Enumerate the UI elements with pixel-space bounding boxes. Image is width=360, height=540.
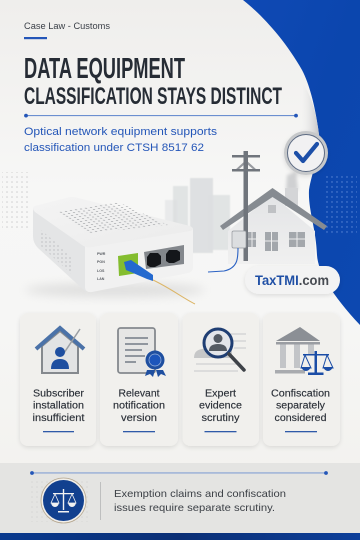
icon: magnifier <box>194 329 246 371</box>
ethernet ports <box>144 245 184 269</box>
footer text: issues require separate scrutiny. <box>114 503 275 514</box>
skyline <box>165 178 230 253</box>
label: installation <box>33 400 84 412</box>
title rule <box>24 114 298 118</box>
label <box>32 388 85 424</box>
footer text <box>114 489 286 514</box>
status labels <box>97 252 106 281</box>
icon: house with subscriber <box>36 328 84 373</box>
dot pattern: left <box>2 172 28 230</box>
label: considered <box>274 413 326 424</box>
label: Subscriber <box>33 388 85 400</box>
card: notification version <box>100 313 178 446</box>
left face <box>33 208 86 292</box>
label: scrutiny <box>202 413 240 424</box>
title <box>24 53 282 110</box>
utility pole <box>232 151 260 261</box>
page curl shading <box>300 84 319 142</box>
subtitle: Optical network equipment supports <box>24 126 217 138</box>
top face <box>33 197 193 247</box>
status labels: LAN <box>97 277 105 281</box>
blue connector <box>124 260 153 281</box>
floor shadow <box>25 283 205 297</box>
footer dots <box>28 480 90 522</box>
footer panel <box>0 463 360 533</box>
status labels: PON <box>97 260 105 264</box>
card: expert evidence <box>182 313 259 446</box>
card: subscriber installation <box>20 313 96 446</box>
front face <box>85 229 193 292</box>
house <box>220 188 327 264</box>
icon: court and scales <box>275 327 333 375</box>
chimney smoke <box>286 172 298 190</box>
card: confiscation <box>263 313 340 446</box>
label: insufficient <box>32 413 85 424</box>
icon: certificate <box>118 328 166 377</box>
subtitle: classification under CTSH 8517 62 <box>24 142 204 154</box>
windows <box>248 232 305 251</box>
label: separately <box>276 400 325 412</box>
icon: scales emblem <box>41 478 86 523</box>
label: Relevant <box>118 388 160 400</box>
vent holes <box>56 202 168 233</box>
site pill: TaxTMI.com <box>255 272 329 288</box>
label: version <box>121 413 157 424</box>
label: evidence <box>199 400 242 412</box>
footer rule <box>30 471 328 475</box>
status labels: LOS <box>97 269 105 273</box>
eyebrow accent <box>24 37 47 39</box>
title: DATA EQUIPMENT <box>24 53 185 85</box>
green port <box>118 253 138 276</box>
side vents <box>39 228 71 274</box>
blue drop cable <box>208 248 238 272</box>
dot pattern: right <box>325 175 357 233</box>
label: notification <box>113 400 165 412</box>
subtitle <box>24 126 217 154</box>
junction box <box>232 231 246 248</box>
label <box>271 388 330 424</box>
label <box>199 388 242 424</box>
eyebrow label: Case Law - Customs <box>24 21 111 31</box>
site pill <box>245 266 340 294</box>
status labels: PWR <box>97 252 106 256</box>
label <box>113 388 165 424</box>
yellow fibre <box>153 280 195 304</box>
footer band <box>0 533 360 540</box>
blue corner panel <box>243 0 360 325</box>
router <box>33 197 195 304</box>
badge: check <box>284 131 328 175</box>
footer text: Exemption claims and confiscation <box>114 489 286 500</box>
label: Expert <box>205 388 236 400</box>
label: Confiscation <box>271 388 330 400</box>
footer divider <box>99 482 102 520</box>
